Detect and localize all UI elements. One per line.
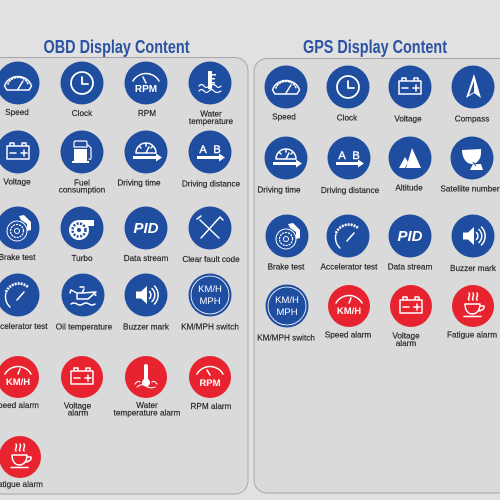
labels: OBD: alarm xyxy=(68,408,88,418)
labels: OBD: Buzzer mark xyxy=(123,322,170,332)
icon: GPS brake test xyxy=(266,214,308,258)
icon: OBD fatigue alarm xyxy=(0,436,41,478)
icon: GPS speed alarm: KM/H xyxy=(337,306,361,317)
labels: GPS: Accelerator test xyxy=(321,262,378,272)
labels: OBD: Fuel xyxy=(74,178,90,188)
icon: GPS data stream xyxy=(388,214,432,258)
labels: OBD: RPM alarm xyxy=(191,402,232,411)
labels: GPS: Driving time xyxy=(257,186,301,194)
title: OBD: OBD Display Content xyxy=(44,37,190,57)
labels: OBD: temperature xyxy=(189,117,234,126)
icon: OBD driving time xyxy=(124,130,168,174)
labels: OBD: Oil temperature xyxy=(56,322,113,332)
labels: OBD: Data stream xyxy=(124,254,168,263)
title: GPS: GPS Display Content xyxy=(303,37,447,57)
icon: OBD water temperature xyxy=(188,62,232,104)
labels: OBD: RPM xyxy=(138,109,156,118)
labels: GPS: Altitude xyxy=(395,184,423,192)
labels: OBD: Water xyxy=(200,110,222,118)
labels: OBD: Speed xyxy=(5,108,29,117)
labels: OBD: Clock xyxy=(72,109,93,118)
icon: GPS satellite number xyxy=(450,136,494,180)
icon: GPS driving distance xyxy=(328,136,370,180)
icon: GPS voltage xyxy=(388,66,432,108)
icon: GPS driving time xyxy=(264,136,308,180)
icon: OBD buzzer mark xyxy=(124,274,168,316)
icon: OBD speed xyxy=(0,62,40,104)
labels: GPS: Clock xyxy=(337,114,358,122)
labels: OBD: consumption xyxy=(59,186,106,194)
labels: GPS: alarm xyxy=(396,339,416,348)
panel: OBD xyxy=(0,58,248,494)
labels: GPS: Voltage xyxy=(392,332,420,340)
icon: OBD data stream xyxy=(124,206,168,250)
icon: OBD speed alarm xyxy=(0,356,39,398)
icon: OBD oil temperature xyxy=(62,274,104,316)
icon: GPS voltage alarm xyxy=(390,285,432,327)
panel: GPS xyxy=(254,58,500,493)
icon: GPS altitude xyxy=(388,136,432,180)
icon: GPS buzzer mark xyxy=(452,214,494,258)
icon: OBD RPM: RPM xyxy=(135,84,157,95)
icon: OBD speed alarm: KM/H xyxy=(6,377,30,388)
icon: OBD voltage alarm xyxy=(61,356,103,398)
labels: OBD: Turbo xyxy=(71,254,93,263)
labels: GPS: Driving distance xyxy=(321,186,380,195)
labels: GPS: Speed alarm xyxy=(325,330,371,340)
icon: OBD clear fault code xyxy=(188,206,232,250)
icon: OBD driving distance xyxy=(188,130,232,174)
labels: OBD: Voltage xyxy=(64,402,92,410)
labels: OBD: Driving distance xyxy=(182,180,241,188)
icon: OBD RPM alarm: RPM xyxy=(199,378,221,389)
labels: GPS: Satellite number xyxy=(440,184,500,194)
icon: GPS accelerator test xyxy=(326,214,370,258)
labels: GPS: Speed xyxy=(272,112,296,122)
labels: GPS: Data stream xyxy=(388,262,432,272)
icon: OBD RPM alarm xyxy=(189,356,231,398)
labels: OBD: KM/MPH switch xyxy=(181,322,239,332)
labels: GPS: Fatigue alarm xyxy=(447,330,497,340)
icon: OBD clock xyxy=(60,62,104,104)
icon: OBD KM/MPH switch xyxy=(188,274,232,316)
icon: OBD RPM xyxy=(124,62,168,104)
labels: OBD: temperature alarm xyxy=(114,408,181,418)
icon: GPS speed alarm xyxy=(328,285,370,327)
labels: GPS: Voltage xyxy=(394,114,422,124)
icon: OBD brake test xyxy=(0,206,40,250)
icon: OBD voltage xyxy=(0,130,40,174)
labels: GPS xyxy=(257,112,500,348)
labels: GPS: Buzzer mark xyxy=(450,264,497,273)
icon: GPS speed xyxy=(264,66,308,108)
labels: OBD: Voltage xyxy=(3,178,31,186)
icon: OBD accelerator test xyxy=(0,274,40,316)
labels: GPS: Compass xyxy=(455,114,489,124)
icon: GPS fatigue alarm xyxy=(452,285,494,327)
labels: GPS: KM/MPH switch xyxy=(257,334,315,342)
labels: OBD: Clear fault code xyxy=(182,255,240,264)
labels: OBD xyxy=(0,108,241,489)
icon: OBD water temperature alarm xyxy=(125,356,167,398)
labels: GPS: Brake test xyxy=(268,262,305,272)
icon: OBD fuel consumption xyxy=(60,130,104,174)
icon: GPS compass xyxy=(452,66,494,108)
labels: OBD: Water xyxy=(136,401,158,410)
labels: OBD: Driving time xyxy=(117,178,161,188)
icon: GPS KM/MPH switch xyxy=(266,284,308,328)
icon: OBD turbo xyxy=(60,206,104,250)
icon: GPS clock xyxy=(326,66,370,108)
